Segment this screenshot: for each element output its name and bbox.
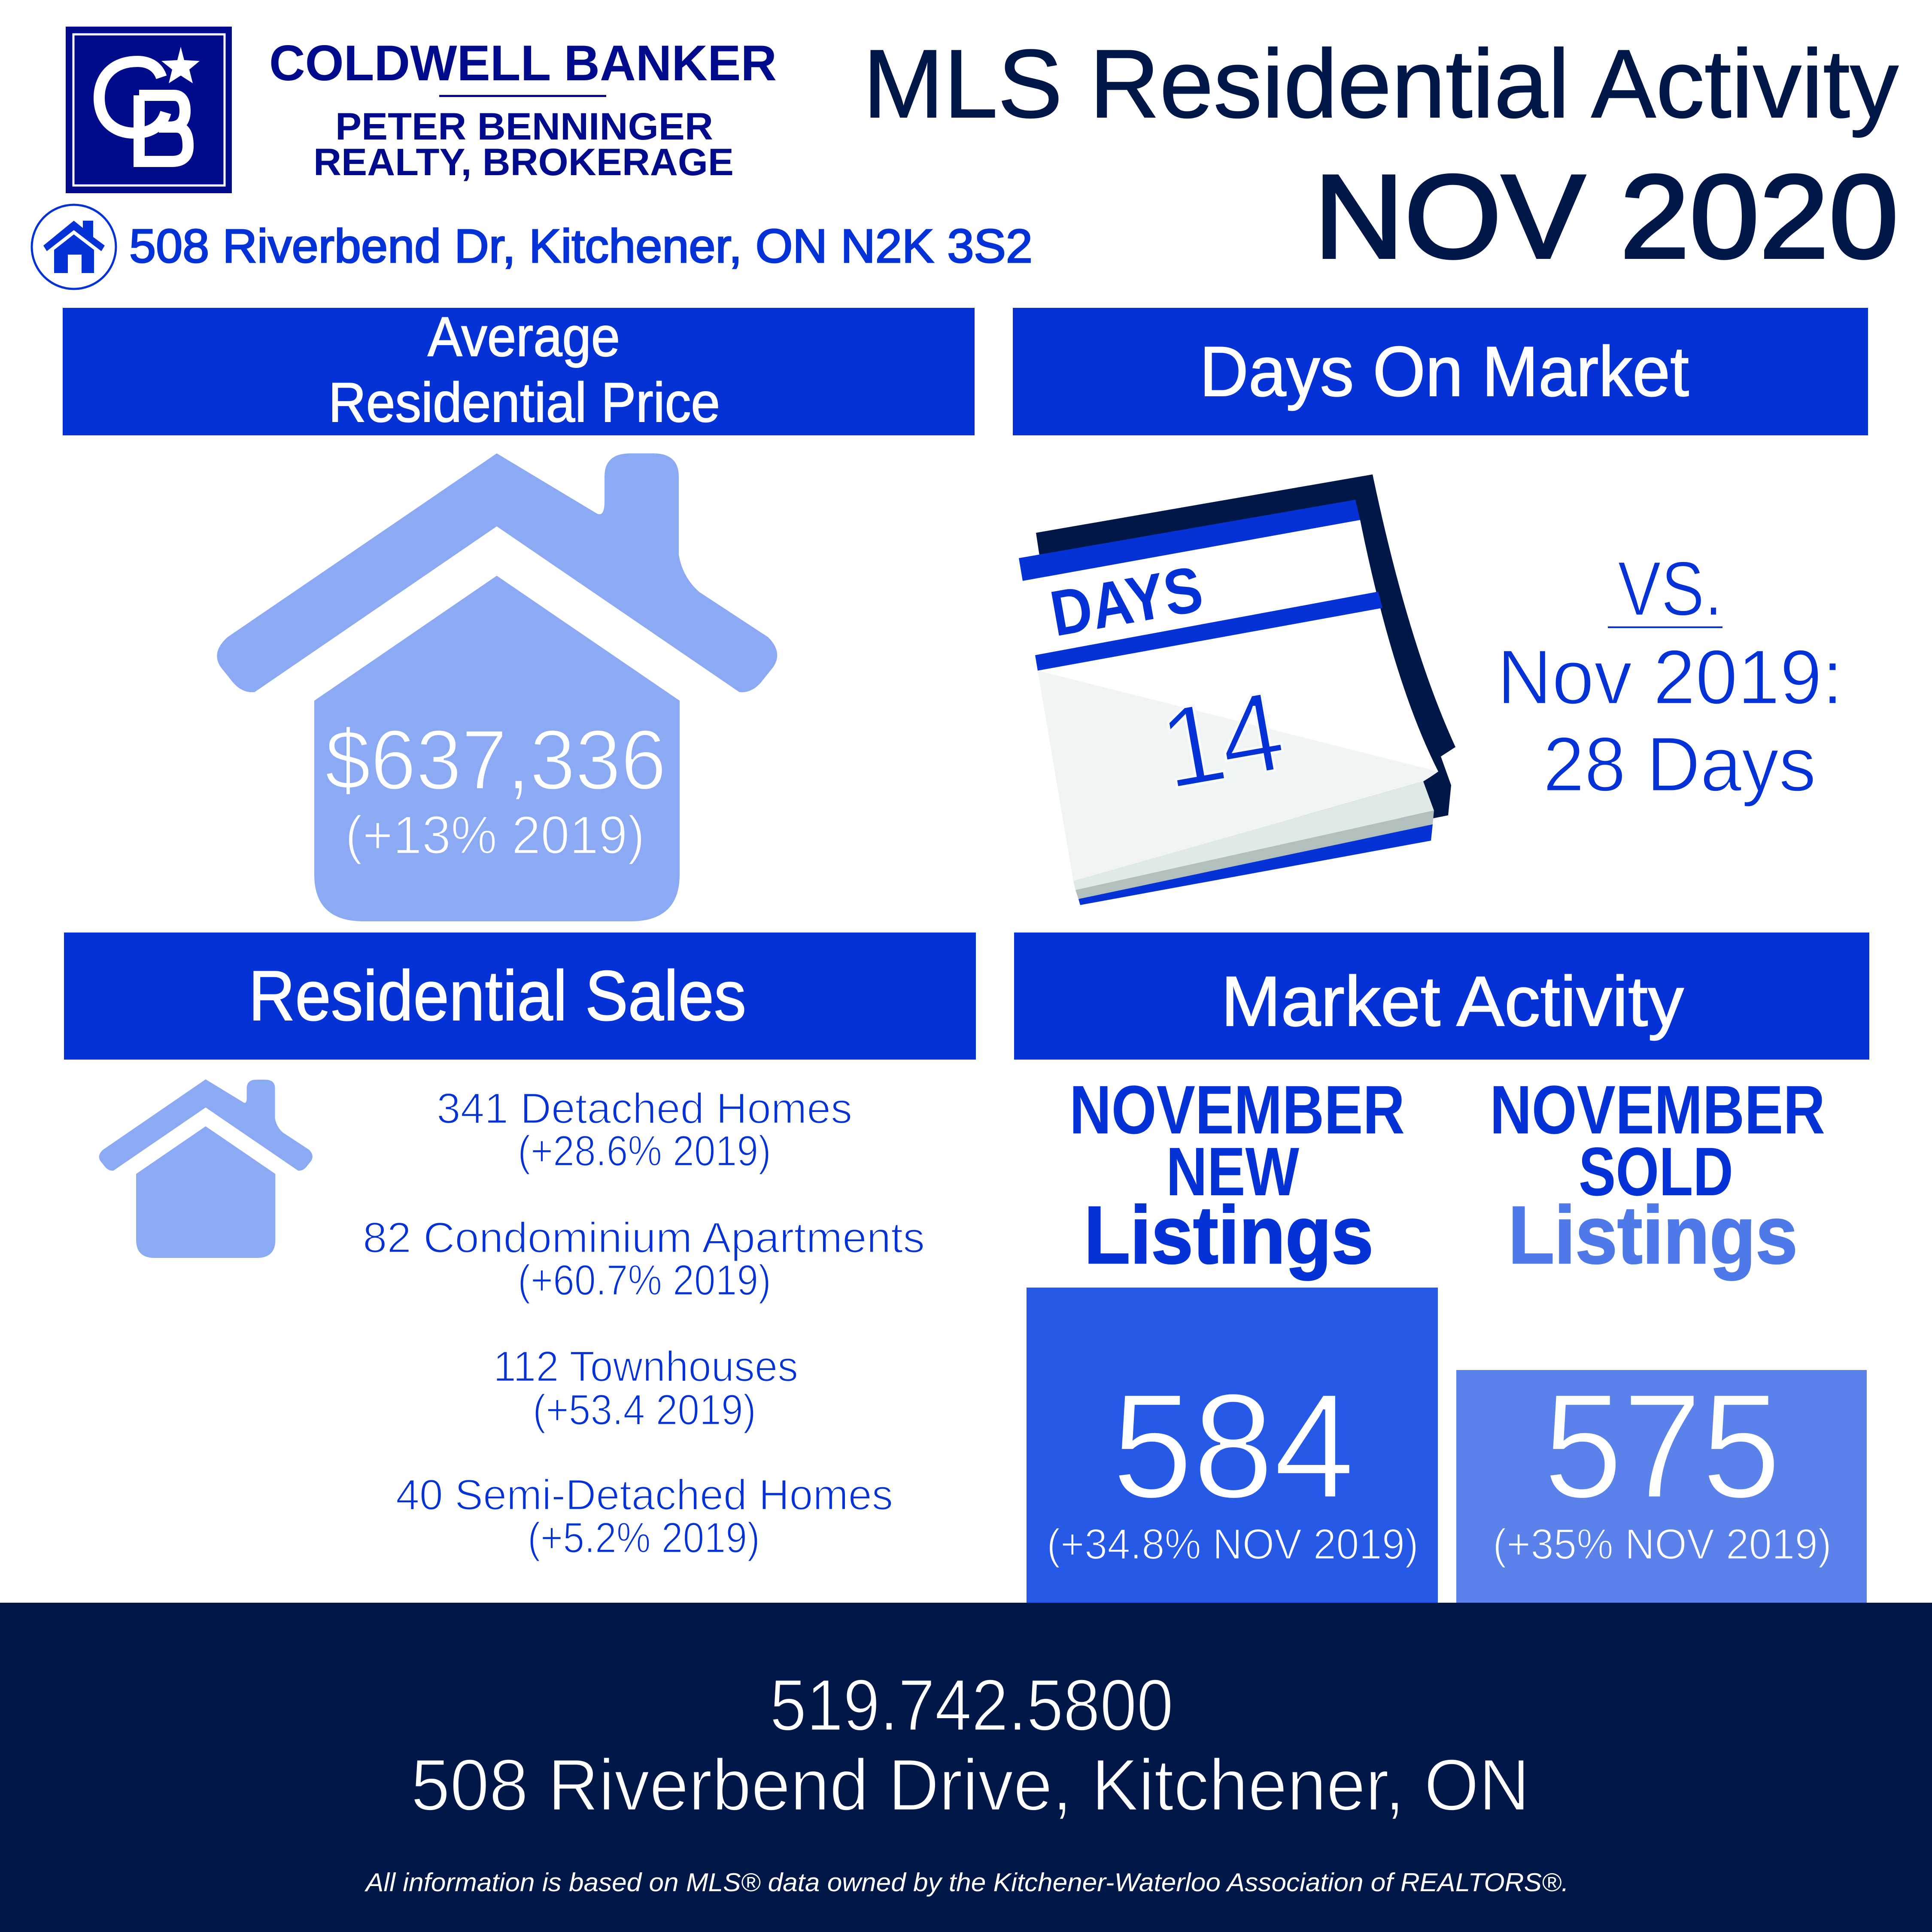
- list: residential sales by type: (+28.6% 2019): [518, 1127, 771, 1175]
- average price value: $637,336: [325, 712, 666, 807]
- footer phone: 519.742.5800: [770, 1665, 1173, 1746]
- heading: november sold listings: NOVEMBER: [1490, 1071, 1825, 1148]
- company name: Peter Benninger Realty: REALTY, BROKERAGE: [313, 140, 734, 183]
- panel header: market activity: [1014, 933, 1869, 1060]
- icon: calendar showing 14 days: [1019, 474, 1455, 905]
- stat box: sold listings: (+35% NOV 2019): [1493, 1520, 1832, 1568]
- stat box: sold listings: 575: [1543, 1362, 1781, 1529]
- stat box: sold listings: [1456, 1362, 1867, 1603]
- list: residential sales by type: [363, 1084, 925, 1562]
- list: residential sales by type: 40 Semi-Detached Homes: [396, 1471, 893, 1519]
- list: residential sales by type: 112 Townhouses: [493, 1343, 798, 1391]
- icon: address house: [32, 205, 116, 289]
- heading: november sold listings: [1490, 1071, 1825, 1281]
- average price change: (+13% 2019): [345, 805, 645, 865]
- panel header: residential sales: [64, 933, 976, 1060]
- icon: house with average price: [217, 453, 777, 921]
- stat box: new listings: [1027, 1288, 1438, 1603]
- company name: Peter Benninger Realty: PETER BENNINGER: [335, 105, 713, 148]
- list: residential sales by type: (+5.2% 2019): [528, 1514, 760, 1562]
- heading: november sold listings: Listings: [1508, 1190, 1798, 1281]
- title: MLS Residential Activity: [863, 29, 1899, 138]
- comparison: Nov 2019 days: [1497, 546, 1843, 808]
- heading: november sold listings: SOLD: [1579, 1133, 1733, 1210]
- company name: Coldwell Banker: COLDWELL BANKER: [269, 35, 777, 91]
- list: residential sales by type: (+53.4 2019): [533, 1386, 756, 1434]
- heading: november new listings: Listings: [1084, 1190, 1373, 1281]
- panel header: average residential price: Residential Price: [328, 371, 720, 434]
- disclaimer: All information is based on MLS® data owned by the Kitchener-Waterloo Association of REALTORS®.: [365, 1868, 1569, 1897]
- title: [863, 29, 1899, 283]
- heading: november new listings: NOVEMBER: [1069, 1071, 1405, 1148]
- panel header: residential sales: Residential Sales: [249, 956, 746, 1035]
- stat box: new listings: (+34.8% NOV 2019): [1047, 1520, 1419, 1568]
- footer: [0, 1603, 1932, 1932]
- panel header: average residential price: [63, 305, 975, 435]
- comparison: Nov 2019 days: Nov 2019:: [1497, 634, 1843, 720]
- comparison: Nov 2019 days: 28 Days: [1543, 721, 1816, 808]
- panel header: days on market: Days On Market: [1200, 332, 1689, 411]
- stat box: new listings: 584: [1112, 1362, 1355, 1529]
- panel header: average residential price: Average: [428, 305, 620, 368]
- calendar number: 14: [1151, 667, 1294, 813]
- panel header: market activity: Market Activity: [1221, 962, 1684, 1041]
- company name: Peter Benninger Realty: [313, 105, 734, 183]
- list: residential sales by type: 82 Condominium Apartments: [363, 1214, 925, 1262]
- footer address: 508 Riverbend Drive, Kitchener, ON: [411, 1744, 1530, 1826]
- list: residential sales by type: (+60.7% 2019): [518, 1256, 771, 1304]
- comparison: Nov 2019 days: VS.: [1618, 546, 1722, 632]
- logo: Coldwell Banker: [66, 27, 232, 193]
- title: NOV 2020: [1314, 150, 1899, 283]
- list: residential sales by type: 341 Detached Homes: [437, 1084, 852, 1133]
- address: 508 Riverbend Dr, Kitchener, ON N2K 3S2: [129, 220, 1033, 273]
- calendar label: DAYS: [1045, 552, 1208, 650]
- icon: small house: [99, 1079, 313, 1258]
- panel header: days on market: [1013, 308, 1868, 435]
- heading: november new listings: [1069, 1071, 1405, 1281]
- heading: november new listings: NEW: [1166, 1133, 1299, 1210]
